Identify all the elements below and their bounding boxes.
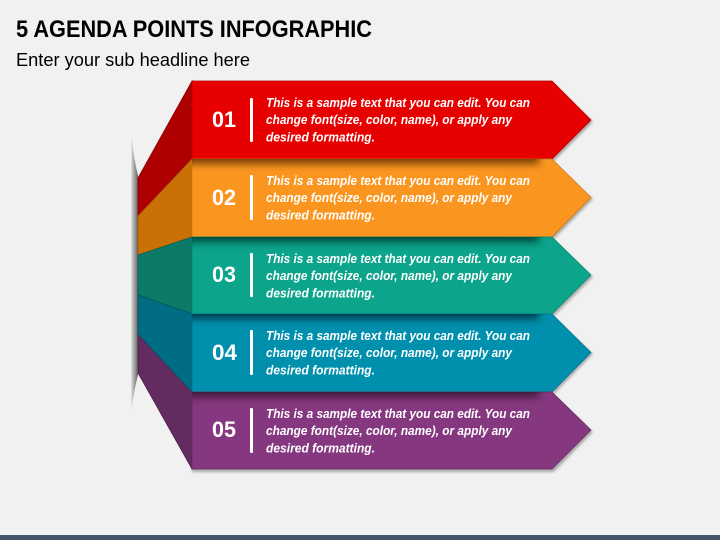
side panel 3: teal (138, 237, 192, 314)
text 3 (266, 252, 530, 300)
text 5: desired formatting. (266, 442, 375, 456)
side panel 4: blue (138, 295, 192, 392)
text 5 (266, 407, 530, 456)
text 2 (266, 174, 530, 222)
divider 1 (250, 98, 253, 142)
shadow on bar 3 (192, 237, 544, 248)
divider 5 (250, 408, 253, 453)
bar outer shadows (192, 83, 593, 472)
text 2: This is a sample text that you can edit. You can (266, 174, 530, 188)
arrow bar 4 (192, 314, 591, 392)
text 5: This is a sample text that you can edit. You can (266, 407, 530, 421)
divider 3 (250, 253, 253, 297)
text 4: desired formatting. (266, 364, 375, 378)
text 3: change font(size, color, name), or apply any (266, 269, 513, 283)
agenda item 2 (192, 158, 592, 238)
side panel 5: purple (138, 334, 192, 469)
text 4: change font(size, color, name), or apply any (266, 346, 513, 360)
text 3: desired formatting. (266, 286, 375, 300)
text 4: This is a sample text that you can edit. You can (266, 329, 530, 343)
text 2: desired formatting. (266, 208, 375, 222)
shadow on bar 2 (192, 159, 544, 170)
shadow on bar 4 (192, 314, 544, 324)
title: 5 AGENDA POINTS INFOGRAPHIC (16, 16, 372, 43)
footer bar (0, 535, 720, 540)
text 2: change font(size, color, name), or apply any (266, 191, 513, 205)
side panel 2: orange (138, 159, 192, 255)
shadow on bar 5 (192, 392, 543, 402)
arrow bar 5 (192, 392, 591, 469)
text 1: This is a sample text that you can edit. You can (266, 96, 530, 110)
side panel 1: red (138, 81, 192, 216)
agenda item 5 (192, 392, 592, 470)
text 1 (266, 96, 530, 144)
text 3: This is a sample text that you can edit. You can (266, 252, 530, 266)
subtitle: Enter your sub headline here (16, 50, 250, 70)
left edge shadow (131, 137, 138, 410)
text 1: change font(size, color, name), or apply any (266, 113, 513, 127)
arrow bar 1 (192, 81, 591, 159)
agenda item 3 (192, 236, 592, 314)
number 01: 01 (212, 107, 236, 132)
number 02: 02 (212, 185, 236, 210)
arrow bar 3 (192, 237, 591, 314)
number 04: 04 (212, 340, 238, 365)
number 05: 05 (212, 417, 236, 442)
text 5: change font(size, color, name), or apply any (266, 424, 513, 438)
divider 2 (250, 175, 253, 220)
side panels (138, 81, 192, 469)
agenda item 1 (192, 81, 591, 159)
agenda item 4 (192, 314, 592, 392)
arrow bar 2 (192, 159, 591, 237)
text 4 (266, 329, 530, 378)
divider 4 (250, 330, 253, 375)
number 03: 03 (212, 262, 236, 287)
text 1: desired formatting. (266, 130, 375, 144)
